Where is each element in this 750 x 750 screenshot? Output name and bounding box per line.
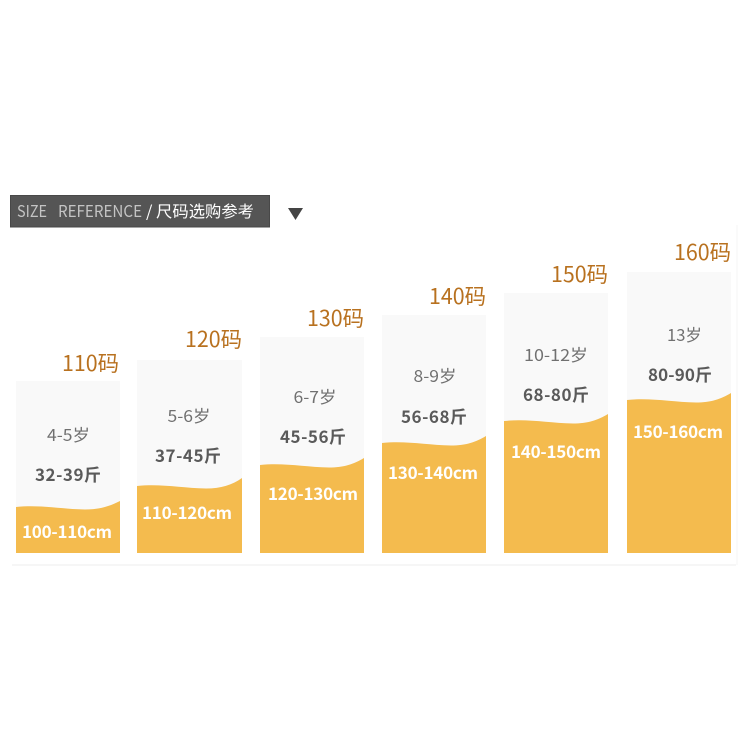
column: size 140: 56-68斤 xyxy=(401,403,467,428)
heading: size reference: REFERENCE xyxy=(58,198,142,222)
column: size 130: 120-130cm xyxy=(268,480,358,505)
size label 120: 120码 xyxy=(185,323,242,354)
size label 150: 150码 xyxy=(551,258,608,289)
column: size 130: 6-7岁 xyxy=(294,384,336,408)
column: size 110 xyxy=(16,347,120,553)
column: size 120: 37-45斤 xyxy=(155,442,221,467)
column: size 110: 4-5岁 xyxy=(47,422,90,446)
column: size 120 xyxy=(137,323,242,553)
column: size 160: 80-90斤 xyxy=(648,361,712,386)
size label 130: 130码 xyxy=(307,302,364,333)
heading: size reference xyxy=(10,196,270,227)
icon: down triangle xyxy=(288,208,303,220)
column: size 160: 13岁 xyxy=(667,322,702,346)
size label 110: 110码 xyxy=(62,347,119,378)
column: size 140: 8-9岁 xyxy=(414,363,456,387)
column: size 150: 140-150cm xyxy=(511,438,601,463)
column: size 130 xyxy=(260,302,364,553)
column: size 150: 10-12岁 xyxy=(524,342,588,366)
column: size 110: 32-39斤 xyxy=(35,461,101,486)
size label 160: 160码 xyxy=(674,236,731,267)
column: size 160 xyxy=(627,236,731,553)
column: size 120: 110-120cm xyxy=(142,499,232,524)
column: size 140 xyxy=(382,280,486,553)
size label 140: 140码 xyxy=(429,280,486,311)
heading: size reference: SIZE xyxy=(17,198,47,222)
column: size 110: 100-110cm xyxy=(22,518,112,543)
column: size 120: 5-6岁 xyxy=(168,403,210,427)
heading: size reference: / 尺码选购参考 xyxy=(146,198,254,222)
column: size 150 xyxy=(504,258,608,553)
column: size 160: 150-160cm xyxy=(633,418,723,443)
column: size 130: 45-56斤 xyxy=(280,423,346,448)
column: size 140: 130-140cm xyxy=(388,459,478,484)
column: size 150: 68-80斤 xyxy=(523,381,589,406)
